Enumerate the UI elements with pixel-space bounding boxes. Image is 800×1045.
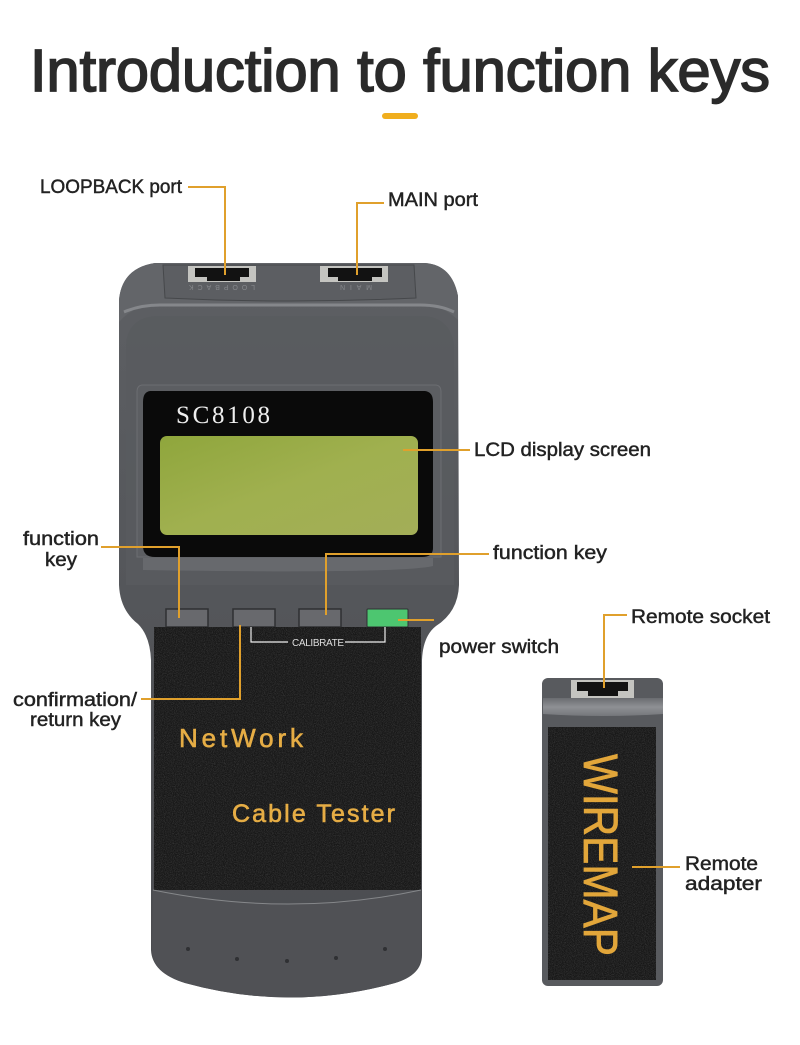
- model name: SC8108: [176, 402, 270, 429]
- confirmation key label: [13, 690, 138, 731]
- calibrate bracket: CALIBRATE: [292, 638, 344, 649]
- left function key label: [23, 529, 99, 571]
- remote socket leader: [604, 615, 627, 688]
- MAIN port label: MAIN port: [388, 190, 479, 211]
- NetWork print: NetWork: [179, 723, 304, 753]
- upper ridge highlight: [124, 305, 454, 312]
- main tester device: [119, 263, 459, 998]
- confirmation key label: return key: [30, 710, 122, 731]
- WIREMAP print: WIREMAP: [573, 754, 626, 956]
- LCD leader: [403, 449, 470, 451]
- LCD label: LCD display screen: [474, 440, 651, 461]
- remote adapter label: Remote: [685, 854, 758, 875]
- bottom edge highlight: [153, 890, 421, 904]
- remote adapter leader: [632, 866, 680, 868]
- ridge under screen: [143, 558, 433, 571]
- top cap: [119, 263, 458, 322]
- bottom dots: [186, 947, 387, 963]
- remote socket label: Remote socket: [631, 607, 771, 628]
- remote socket: [571, 680, 634, 698]
- remote adapter label: adapter: [685, 874, 763, 895]
- front panel: [126, 316, 454, 585]
- bottom base: [152, 890, 421, 998]
- confirmation key: [233, 609, 275, 627]
- MAIN port print: MAIN: [340, 283, 372, 290]
- left function key leader: [101, 547, 179, 618]
- right function key label: function key: [493, 543, 608, 564]
- confirmation key label: confirmation/: [13, 690, 138, 711]
- function key right: [299, 609, 341, 627]
- power switch key: [367, 609, 408, 627]
- calibrate bracket: [251, 627, 385, 649]
- remote adapter device: [542, 678, 663, 986]
- MAIN port socket: [320, 266, 388, 282]
- device body: [119, 263, 459, 998]
- remote body: [542, 678, 663, 986]
- black screen surround: [143, 391, 433, 557]
- felt panel: [154, 627, 421, 890]
- LOOPBACK port label: LOOPBACK port: [40, 177, 183, 198]
- left function key label: function: [23, 529, 99, 550]
- remote adapter label: [685, 854, 763, 895]
- MAIN port leader: [357, 203, 384, 275]
- LOOPBACK port print: LOOPBACK: [189, 283, 255, 290]
- power switch leader: [398, 619, 434, 621]
- right function key leader: [326, 554, 489, 615]
- left function key label: key: [45, 550, 78, 571]
- Cable Tester print: Cable Tester: [232, 800, 395, 828]
- confirmation key leader: [141, 625, 240, 699]
- function key left: [166, 609, 208, 627]
- remote top band: [543, 698, 663, 716]
- LOOPBACK port leader: [188, 187, 225, 275]
- LCD display: [160, 436, 418, 535]
- top port recess: [163, 265, 416, 301]
- LOOPBACK port socket: [188, 266, 256, 282]
- power switch label: power switch: [439, 637, 559, 658]
- screen bezel: [137, 385, 441, 557]
- title accent bar: [382, 113, 418, 119]
- remote felt panel: [548, 727, 656, 980]
- title: Introduction to function keys: [30, 38, 770, 104]
